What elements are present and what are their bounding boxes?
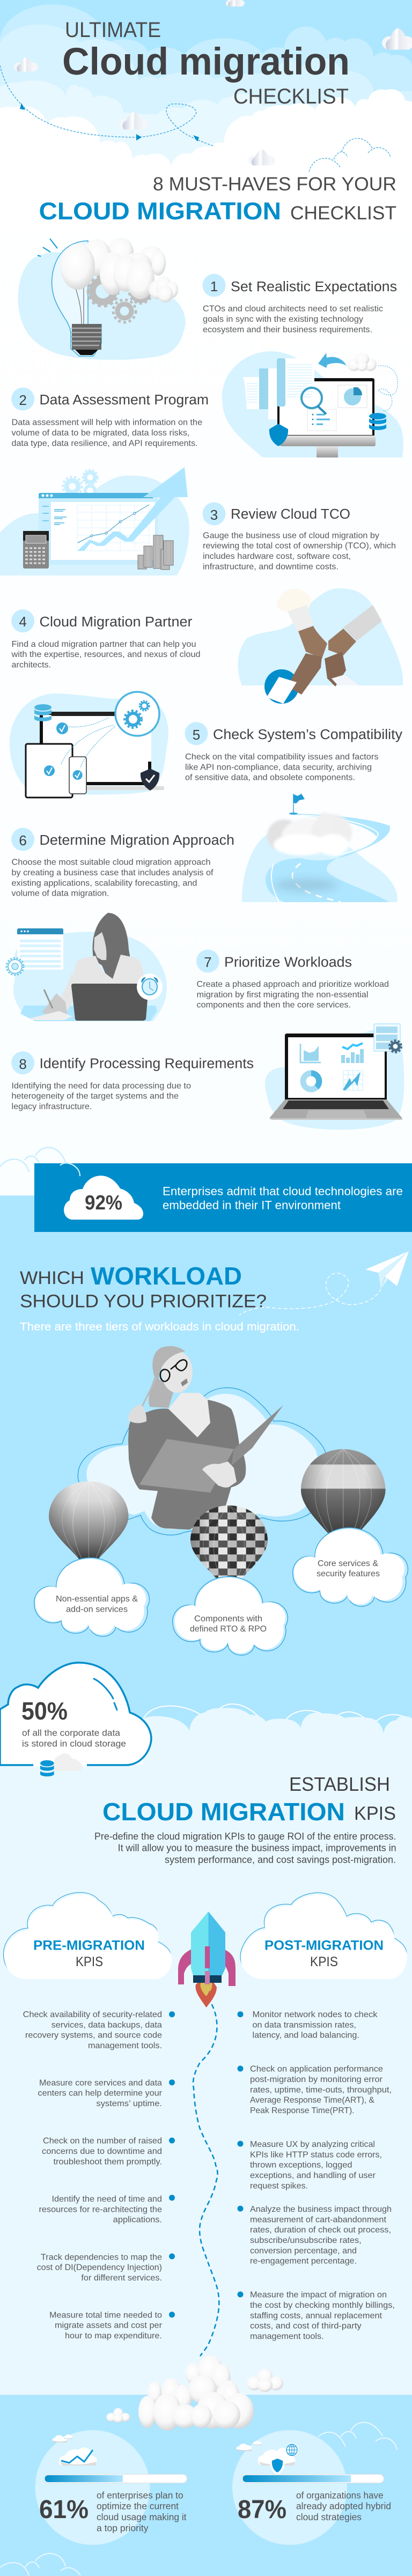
stat 92%: 92% — [85, 1192, 122, 1214]
step body 8: legacy infrastructure. — [12, 1102, 92, 1111]
icon: cloud with shield and globe — [237, 2441, 298, 2475]
post-migration cloud header — [240, 1893, 407, 1979]
heading: 8 must-haves: 8 MUST-HAVES FOR YOUR — [153, 174, 396, 195]
intro text: It will allow you to measure the business impact, improvements in — [118, 1843, 396, 1854]
heading: establish KPIs: CLOUD MIGRATION — [102, 1798, 345, 1826]
post KPI 4: Analyze the business impact through — [250, 2205, 392, 2214]
step number 7: 7 — [204, 954, 212, 970]
dashed route line — [193, 2004, 219, 2356]
step body 5: of sensitive data, and obsolete components. — [185, 773, 355, 783]
step number 4 — [11, 609, 34, 632]
stat text 61%: cloud usage making it — [97, 2512, 187, 2522]
pre KPI 3: Check on the number of raised — [43, 2137, 162, 2146]
icon: cloud with chart — [52, 2434, 97, 2466]
intro text — [94, 1831, 396, 1865]
icon: paper cloud left — [14, 57, 38, 72]
pre KPI 1 — [23, 2010, 175, 2050]
panel: step 1 text — [203, 274, 397, 334]
label: core services: Core services & — [318, 1559, 378, 1568]
heading: which workload: WORKLOAD — [91, 1262, 242, 1290]
step body 6 — [12, 858, 214, 898]
pre KPI 1: recovery systems, and source code — [25, 2031, 162, 2040]
label: non-essential apps — [34, 1558, 149, 1636]
step body 3: includes hardware cost, software cost, — [203, 552, 351, 561]
pre KPI 4: Identify the need of time and — [52, 2195, 162, 2204]
icon: paper cloud top — [226, 0, 245, 6]
step heading 4: Cloud Migration Partner — [40, 615, 193, 630]
step number 6: 6 — [19, 832, 27, 848]
big cloud behind woman — [78, 1387, 328, 1535]
step number 1: 1 — [210, 278, 218, 294]
step body 6: volume of data migration. — [12, 889, 109, 898]
step body 1 — [203, 305, 383, 334]
post KPI 3: request spikes. — [250, 2181, 308, 2190]
step number 2 — [11, 387, 34, 411]
label: non-essential apps: Non-essential apps & — [56, 1595, 138, 1604]
heading: which workload: SHOULD YOU PRIORITIZE? — [20, 1291, 267, 1312]
stat text: is stored in cloud storage — [22, 1739, 126, 1749]
post KPI 2: Check on application performance — [250, 2065, 383, 2074]
heading: 8 must-haves — [39, 174, 396, 225]
post-migration cloud header: KPIS — [310, 1954, 338, 1969]
step body 1: CTOs and cloud architects need to set realistic — [203, 305, 383, 314]
panel: stat 87% — [232, 2430, 391, 2545]
pre KPI 6: Measure total time needed to — [49, 2311, 162, 2320]
title — [62, 18, 350, 108]
pre KPI 3: troubleshoot them promptly. — [54, 2157, 162, 2166]
icon: cloud storage — [40, 1753, 82, 1776]
section background: footer stats — [0, 2395, 412, 2576]
step number 8: 8 — [19, 1056, 27, 1072]
post KPI 2: Average Response Time(ART), & — [250, 2096, 374, 2105]
post KPI 2: post-migration by monitoring error — [250, 2075, 383, 2084]
step number 1 — [203, 274, 225, 297]
post KPI 1 — [237, 2010, 378, 2040]
pre KPI 2 — [38, 2078, 175, 2108]
step body 2: volume of data to be migrated, data loss risks, — [12, 429, 190, 438]
panel: step 4 text — [11, 609, 201, 669]
pre KPI 1: Check availability of security-related — [23, 2010, 162, 2019]
panel: step 8 illustration laptop dashboard — [265, 1024, 404, 1130]
post KPI 5: costs, and cost of third-party — [250, 2322, 362, 2331]
step body 7: migration by first migrating the non-essential — [196, 990, 368, 999]
step body 3 — [203, 531, 396, 571]
step body 6: existing applications, scalability forecasting, and — [12, 879, 197, 888]
label: non-essential apps: add-on services — [66, 1605, 128, 1614]
pre-migration cloud header — [3, 1892, 172, 1979]
step body 2: data type, data resilience, and API requirements. — [12, 439, 198, 448]
post KPI 4: re-engagement percentage. — [250, 2257, 357, 2266]
step body 2: Data assessment will help with information on the — [12, 418, 202, 427]
step number 4: 4 — [19, 614, 27, 630]
stat value 61%: 61% — [39, 2496, 89, 2524]
step body 1: ecosystem and their business requirements. — [203, 325, 372, 334]
pre KPI 2: centers can help determine your — [38, 2089, 163, 2098]
stat text 61%: a top priority — [97, 2522, 149, 2533]
arrow markers on flight path — [20, 103, 199, 142]
intro text: Pre-define the cloud migration KPIs to gauge ROI of the entire process. — [94, 1831, 396, 1842]
pre KPI 6: hour to map expenditure. — [65, 2331, 162, 2341]
pre KPI 3 — [42, 2137, 175, 2166]
pre KPI 5: cost of DI(Dependency Injection) — [37, 2263, 162, 2272]
section background: workload — [0, 1195, 412, 1737]
step heading 2: Data Assessment Program — [40, 393, 209, 408]
step number 3: 3 — [210, 507, 218, 523]
balloon: middle — [190, 1505, 268, 1578]
panel: step 1 illustration light bulb — [18, 238, 186, 360]
post KPI 1: Monitor network nodes to check — [252, 2010, 378, 2019]
step body 4 — [11, 640, 201, 669]
panel: step 8 text — [11, 1051, 254, 1111]
stat text 61%: optimize the current — [97, 2500, 179, 2511]
pre KPI 1: services, data backups, data — [52, 2020, 162, 2029]
step number 7 — [196, 949, 219, 973]
pre KPI 4: resources for re-architecting the — [39, 2205, 162, 2214]
post KPI 4 — [237, 2205, 392, 2266]
step heading 7: Prioritize Workloads — [224, 955, 352, 970]
step body 4: architects. — [12, 660, 51, 669]
post KPI 5 — [237, 2291, 395, 2341]
step body 2 — [12, 418, 202, 448]
list: pre-migration KPIs — [23, 2010, 175, 2341]
panel: step 7 illustration woman at laptop — [6, 913, 167, 1021]
stat value 87%: 87% — [238, 2496, 286, 2524]
step number 6 — [11, 828, 34, 851]
progress bar 61% — [44, 2475, 187, 2483]
panel: step 2 illustration data assessment — [222, 351, 403, 457]
progress bar 87% — [241, 2475, 384, 2483]
pre KPI 5: Track dependencies to map the — [41, 2253, 162, 2262]
post KPI 3: Measure UX by analyzing critical — [250, 2140, 375, 2149]
step body 3: Gauge the business use of cloud migration by — [203, 531, 379, 540]
icon: paper plane with trail — [239, 1251, 409, 1315]
post KPI 4: measurement of cart-abandonment — [250, 2215, 387, 2224]
step body 7: components and then the core services. — [196, 1001, 351, 1010]
callout text — [163, 1185, 403, 1212]
step body 4: with the expertise, resources, and nexus of cloud — [11, 650, 201, 659]
callout: 50% cloud — [0, 1663, 151, 1776]
decorative puffy clouds — [106, 2356, 283, 2431]
panel: step 4 illustration joined fists — [238, 588, 403, 704]
pre KPI 6 — [49, 2311, 175, 2341]
post-migration cloud header: POST-MIGRATION — [264, 1938, 384, 1953]
panel: step 3 text — [203, 502, 396, 571]
step body 7: Create a phased approach and prioritize workload — [196, 980, 389, 989]
post KPI 5: staffing costs, annual replacement — [250, 2311, 382, 2320]
small puffy cloud left — [106, 2408, 130, 2423]
outline clouds footer — [0, 2423, 397, 2575]
label: components: Components with — [194, 1614, 262, 1623]
heading: which workload: WHICH — [20, 1268, 84, 1288]
icon: paper cloud right — [382, 28, 412, 50]
pre KPI 6: migrate assets and cost per — [55, 2321, 163, 2330]
heading: establish KPIs — [102, 1773, 396, 1826]
big puffy cloud — [138, 2356, 254, 2431]
post KPI 2: Peak Response Time(PRT). — [250, 2106, 354, 2115]
dashed outline cloud — [309, 138, 391, 172]
pre KPI 1: management tools. — [88, 2041, 162, 2050]
title: CHECKLIST — [233, 85, 349, 108]
pre KPI 5: for different services. — [81, 2274, 162, 2283]
step heading 3: Review Cloud TCO — [231, 507, 350, 522]
post KPI 5: the cost by checking monthly billings, — [250, 2301, 395, 2310]
panel: step 2 text — [11, 387, 209, 448]
step body 5: Check on the vital compatibility issues and factors — [185, 752, 379, 762]
step body 7 — [196, 980, 389, 1010]
panel: step 5 illustration devices compatibility — [10, 692, 168, 798]
heading: 8 must-haves: CLOUD MIGRATION — [39, 197, 281, 225]
balloon: right — [301, 1449, 385, 1533]
pre KPI 4: applications. — [113, 2216, 162, 2225]
step body 6: Choose the most suitable cloud migration approach — [12, 858, 211, 867]
callout banner: 92% — [34, 1163, 412, 1232]
section background: KPI clouds — [0, 1704, 412, 2395]
icon: rocket — [178, 1911, 236, 2007]
outline cloud over banner — [0, 1148, 66, 1172]
step body 5: like API non-compliance, data security, archiving — [185, 763, 372, 772]
step body 3: infrastructure, and downtime costs. — [203, 562, 339, 571]
post KPI 1: on data transmission rates, — [252, 2020, 356, 2029]
stat text 87%: of organizations have — [296, 2490, 384, 2500]
post KPI 5: management tools. — [250, 2332, 324, 2341]
subheading: three tiers: There are three tiers of workloads in cloud migration. — [20, 1321, 299, 1333]
label: components: defined RTO & RPO — [190, 1625, 267, 1634]
post KPI 3 — [237, 2140, 382, 2190]
step body 8 — [12, 1081, 191, 1111]
post KPI 3: KPIs like HTTP status code errors, — [250, 2150, 382, 2159]
stat text: of all the corporate data — [22, 1728, 121, 1738]
step number 5 — [185, 722, 208, 745]
step body 3: reviewing the total cost of ownership (TCO), which — [203, 542, 396, 551]
small puffy cloud right — [247, 2369, 283, 2392]
hero sky with clouds — [0, 0, 412, 231]
step body 1: goals in sync with the existing technology — [203, 315, 363, 324]
post KPI 1: latency, and load balancing. — [252, 2031, 359, 2040]
stat text 61%: of enterprises plan to — [97, 2490, 183, 2500]
panel: step 5 text — [185, 722, 402, 783]
post KPI 4: subscribe/unsubscribe rates, — [250, 2236, 362, 2245]
heading: which workload — [20, 1262, 267, 1312]
step body 8: Identifying the need for data processing due to — [12, 1081, 191, 1090]
dashed flight path — [0, 65, 213, 146]
pre KPI 2: Measure core services and data — [39, 2078, 162, 2087]
step heading 8: Identify Processing Requirements — [40, 1057, 254, 1072]
icon: white cloud — [64, 1176, 143, 1220]
heading: 8 must-haves: CHECKLIST — [290, 203, 396, 224]
panel: step 3 illustration TCO chart — [0, 467, 189, 575]
stat text 61% — [97, 2490, 187, 2533]
callout text: embedded in their IT environment — [163, 1198, 341, 1212]
step body 4: Find a cloud migration partner that can help you — [12, 640, 196, 649]
step number 3 — [203, 502, 225, 526]
post KPI 5: Measure the impact of migration on — [250, 2291, 387, 2300]
panel: step 7 text — [196, 949, 389, 1010]
step heading 6: Determine Migration Approach — [40, 833, 234, 848]
pre-migration cloud header: KPIS — [76, 1954, 103, 1969]
step heading 5: Check System’s Compatibility — [213, 727, 402, 742]
pre KPI 4 — [39, 2195, 175, 2225]
icon: paper cloud lower — [248, 149, 275, 165]
step body 8: heterogeneity of the target systems and the — [12, 1092, 179, 1101]
pre KPI 5 — [37, 2253, 175, 2283]
list: post-migration KPIs — [237, 2010, 395, 2341]
title: Cloud migration — [62, 41, 350, 83]
post KPI 2: rates, uptime, time-outs, throughput, — [250, 2085, 392, 2094]
callout text: Enterprises admit that cloud technologies are — [163, 1185, 403, 1198]
post KPI 3: thrown exceptions, logged — [250, 2161, 352, 2170]
stat 50%: 50% — [21, 1697, 68, 1725]
stat text 87%: cloud strategies — [296, 2512, 362, 2522]
heading: establish KPIs: KPIS — [354, 1803, 396, 1824]
post KPI 4: conversion percentage, and — [250, 2246, 357, 2255]
step body 6: by creating a business case that includes analysis of — [12, 868, 214, 877]
post KPI 3: exceptions, and handling of user — [250, 2171, 376, 2180]
intro text: system performance, and cost savings post-migration. — [165, 1854, 396, 1865]
icon: paper cloud centre — [119, 112, 149, 129]
pre KPI 2: systems’ uptime. — [96, 2099, 162, 2108]
title: ULTIMATE — [65, 18, 161, 42]
step number 5: 5 — [193, 727, 200, 743]
stat text 87%: already adopted hybrid — [296, 2500, 391, 2511]
step heading 1: Set Realistic Expectations — [231, 279, 397, 294]
stat text 87% — [296, 2490, 391, 2522]
heading: establish KPIs: ESTABLISH — [289, 1773, 390, 1795]
balloon: left — [49, 1481, 129, 1559]
panel: step 6 text — [11, 828, 234, 898]
step number 2: 2 — [19, 392, 27, 408]
post KPI 4: rates, duration of check out process, — [250, 2226, 391, 2235]
pre KPI 3: concerns due to downtime and — [42, 2147, 162, 2156]
panel: stat 61% — [35, 2430, 187, 2545]
pre-migration cloud header: PRE-MIGRATION — [33, 1938, 145, 1953]
post KPI 2 — [237, 2065, 392, 2115]
step body 5 — [185, 752, 379, 783]
step number 8 — [11, 1051, 34, 1074]
stat text — [22, 1728, 126, 1749]
label: core services: security features — [317, 1569, 380, 1578]
woman with folder — [128, 1346, 283, 1530]
label: core services — [293, 1528, 408, 1606]
panel: step 6 illustration road to flag — [242, 794, 398, 902]
label: components — [173, 1577, 288, 1655]
